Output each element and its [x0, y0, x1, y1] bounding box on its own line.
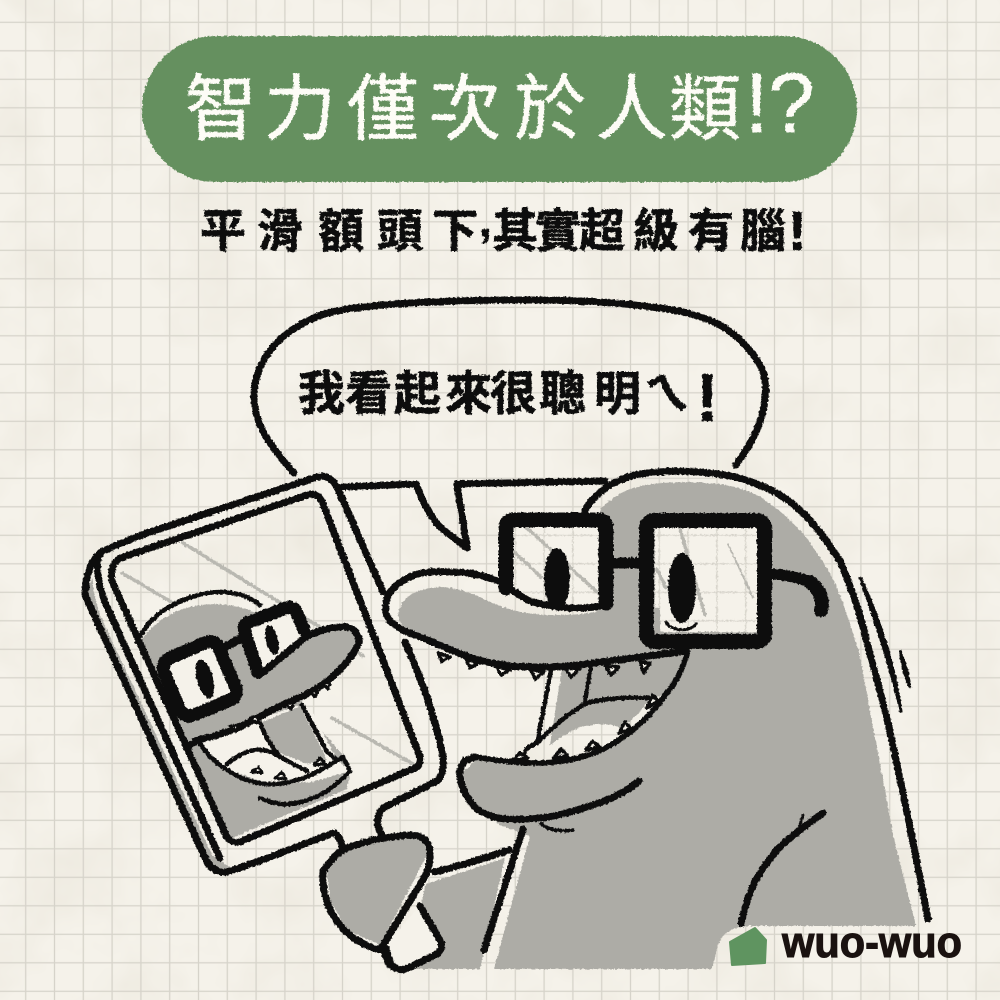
mirror frame inner [111, 494, 420, 842]
mirror handle cap [327, 838, 427, 945]
mirror frame outer [85, 476, 383, 872]
subtitle: 其實超級有腦 [492, 205, 786, 257]
glasses glare [512, 527, 753, 615]
reflection: glasses [163, 608, 304, 716]
reflection: throat [260, 706, 327, 764]
dino [323, 471, 928, 970]
throat [550, 655, 687, 745]
reflection: teeth [230, 682, 330, 779]
upper teeth [438, 653, 650, 679]
dino shoulder fill [405, 858, 505, 969]
mirror [85, 476, 443, 872]
subtitle: , [479, 194, 492, 246]
lens whites [510, 527, 757, 632]
lower jaw [460, 757, 639, 819]
reflection: open mouth [198, 706, 350, 784]
reflection: outlines [137, 592, 359, 804]
mirror handle grip [382, 906, 442, 970]
lower jaw edge [476, 655, 687, 763]
title banner [142, 36, 857, 182]
speech text: 我看起來很聰明ㄟ [298, 367, 691, 420]
title text: !? [745, 56, 815, 150]
speech text: ! [696, 360, 719, 436]
eyes [544, 548, 696, 630]
glasses [506, 520, 822, 642]
subtitle: 平滑額頭下 [200, 205, 478, 257]
chin [541, 824, 573, 831]
mirror side shading [87, 578, 235, 871]
snout outline [386, 572, 687, 667]
title text: 智力僅次於人類 [185, 70, 741, 150]
logo icon: green house [730, 928, 766, 965]
logo text: wuo-wuo [781, 918, 962, 967]
throat lines [521, 667, 651, 756]
snout fill [398, 587, 660, 667]
motion lines [860, 577, 910, 712]
head outline [585, 471, 928, 919]
dino body fill [460, 482, 916, 969]
reflection: snout [197, 627, 358, 740]
neck and hand lines [484, 829, 523, 950]
logo [730, 918, 962, 967]
reflection: lens whites [162, 605, 307, 718]
arm line [741, 813, 823, 924]
lower teeth [512, 695, 658, 761]
subtitle: ! [788, 199, 807, 262]
reflection: dino body [138, 604, 352, 838]
speech bubble [254, 300, 766, 548]
lens grid [510, 527, 757, 632]
reflection: eyes [192, 624, 282, 700]
mirror glare lines [122, 543, 413, 764]
